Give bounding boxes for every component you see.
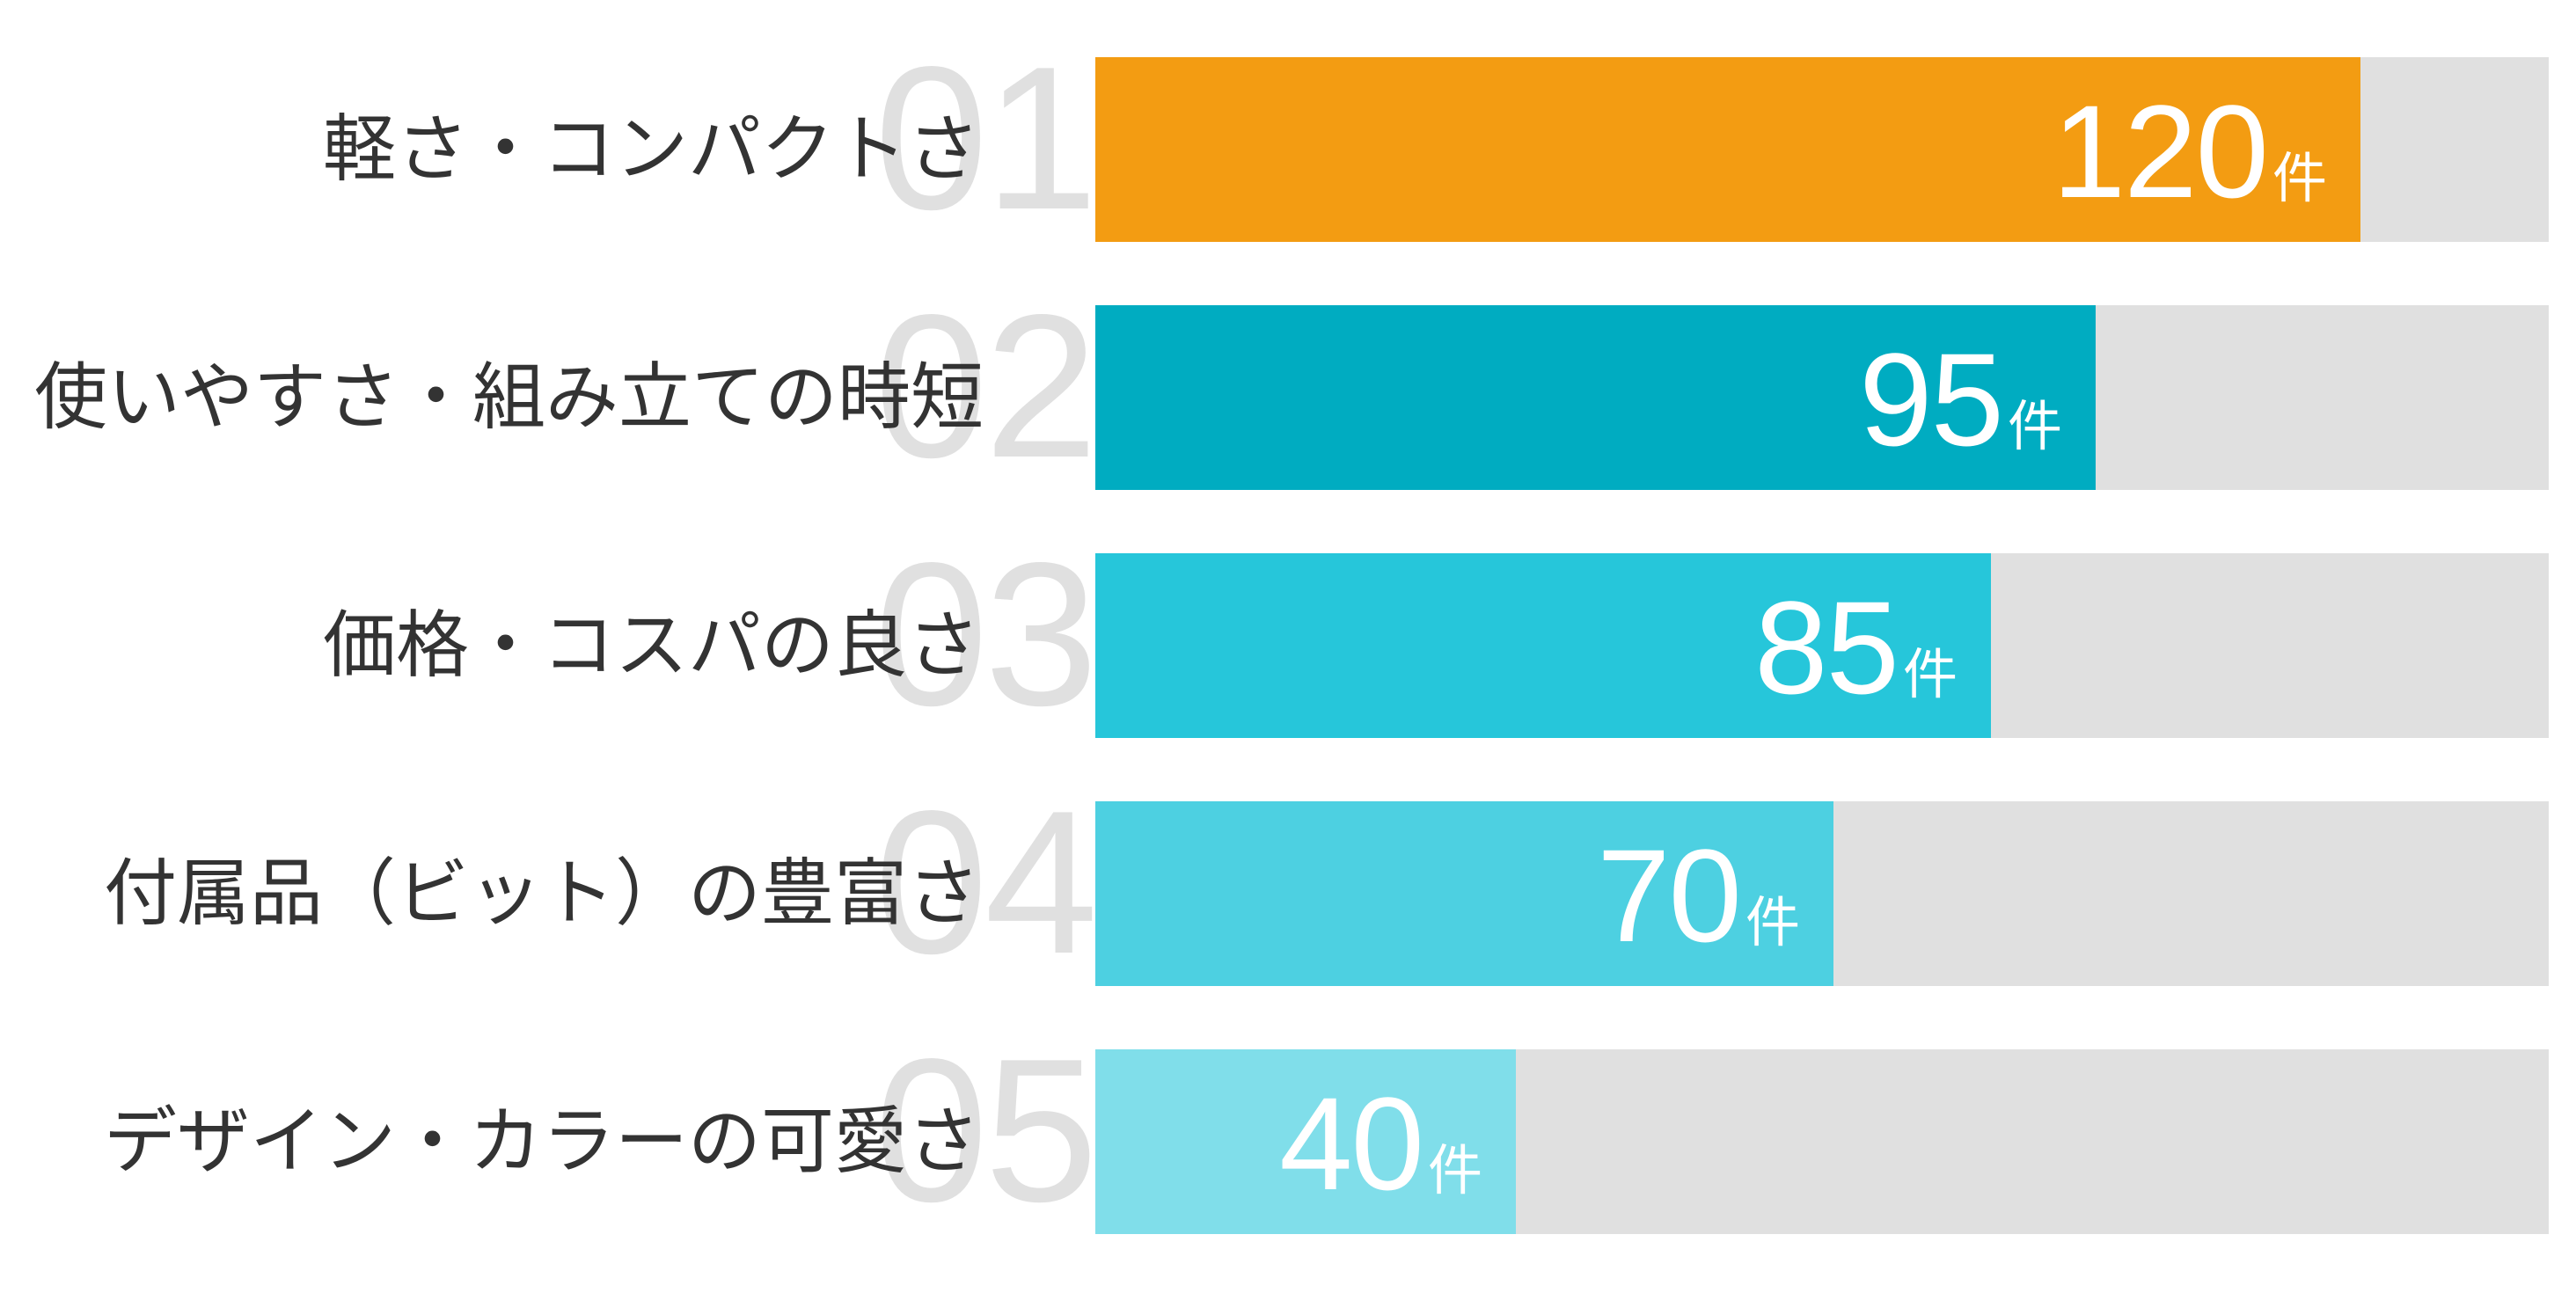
- track 5: [1095, 1049, 2549, 1234]
- rank number 05: 05: [875, 1017, 1094, 1245]
- row 5: design: [104, 1017, 2549, 1245]
- rank number 03: 03: [875, 521, 1094, 749]
- rank number 02: 02: [875, 273, 1094, 500]
- track 1: [1095, 57, 2549, 242]
- bar 1: [1095, 57, 2360, 242]
- track 3: [1095, 553, 2549, 738]
- bar 2: [1095, 305, 2096, 490]
- track 4: [1095, 801, 2549, 986]
- label 3: 価格・コスパの良さ: [323, 604, 980, 686]
- row 2: ease of use: [34, 273, 2549, 500]
- bar 5: [1095, 1049, 1516, 1234]
- row 4: accessories: [104, 769, 2549, 997]
- track 2: [1095, 305, 2549, 490]
- label 5: デザイン・カラーの可愛さ: [104, 1100, 980, 1182]
- rank number 04: 04: [875, 769, 1094, 997]
- value 1: 120件: [2053, 77, 2327, 225]
- label 4: 付属品（ビット）の豊富さ: [104, 852, 980, 934]
- value 3: 85件: [1754, 573, 1958, 721]
- label 2: 使いやすさ・組み立ての時短: [34, 356, 984, 438]
- row 1: lightness: [323, 25, 2549, 252]
- bar 4: [1095, 801, 1833, 986]
- label 1: 軽さ・コンパクトさ: [323, 108, 980, 190]
- value 2: 95件: [1859, 325, 2062, 473]
- row 3: price: [323, 521, 2549, 749]
- bar 3: [1095, 553, 1991, 738]
- rank number 01: 01: [875, 25, 1094, 252]
- value 4: 70件: [1597, 822, 1800, 969]
- value 5: 40件: [1279, 1070, 1482, 1217]
